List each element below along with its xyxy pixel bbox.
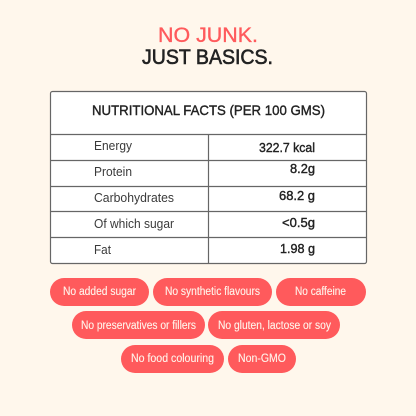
pill: no food colouring [121, 345, 224, 373]
row: energy [94, 138, 315, 155]
row: energy: Energy [94, 138, 132, 153]
table heading: NUTRITIONAL FACTS (PER 100 GMS) [92, 102, 325, 118]
pill: no gluten, lactose or soy [208, 311, 340, 339]
pill: non-gmo: Non-GMO [238, 353, 286, 365]
row: protein: Protein [94, 164, 132, 179]
pill: no added sugar [50, 278, 149, 306]
pill: no added sugar: No added sugar [63, 286, 136, 298]
pill: no caffeine: No caffeine [295, 286, 346, 298]
row: protein: 8.2g [290, 161, 315, 176]
row: energy: 322.7 kcal [259, 140, 315, 155]
pill: no preservatives or fillers [72, 311, 205, 339]
row: of which sugar: <0.5g [282, 215, 315, 230]
title [142, 24, 273, 69]
pill: no preservatives or fillers: No preservatives or fillers [81, 320, 196, 332]
pill: no food colouring: No food colouring [131, 353, 214, 365]
title line 2: JUST BASICS. [142, 46, 273, 69]
row: carbohydrates [94, 188, 315, 205]
row: of which sugar: Of which sugar [94, 216, 175, 231]
row: fat: 1.98 g [280, 241, 315, 256]
pill: no synthetic flavours: No synthetic flavours [165, 286, 260, 298]
row: of which sugar [94, 215, 315, 231]
panel: nutrition table [50, 92, 366, 264]
pill: no synthetic flavours [153, 278, 272, 306]
panel: claim pills [50, 278, 366, 373]
row: fat [94, 241, 315, 257]
row: fat: Fat [94, 242, 111, 257]
row: carbohydrates: 68.2 g [279, 188, 315, 203]
title line 1: NO JUNK. [158, 24, 258, 47]
pill: no gluten, lactose or soy: No gluten, lactose or soy [218, 320, 331, 332]
row: protein [94, 161, 315, 179]
row: carbohydrates: Carbohydrates [94, 190, 174, 205]
pill: non-gmo [228, 345, 296, 373]
pill: no caffeine [276, 278, 366, 306]
